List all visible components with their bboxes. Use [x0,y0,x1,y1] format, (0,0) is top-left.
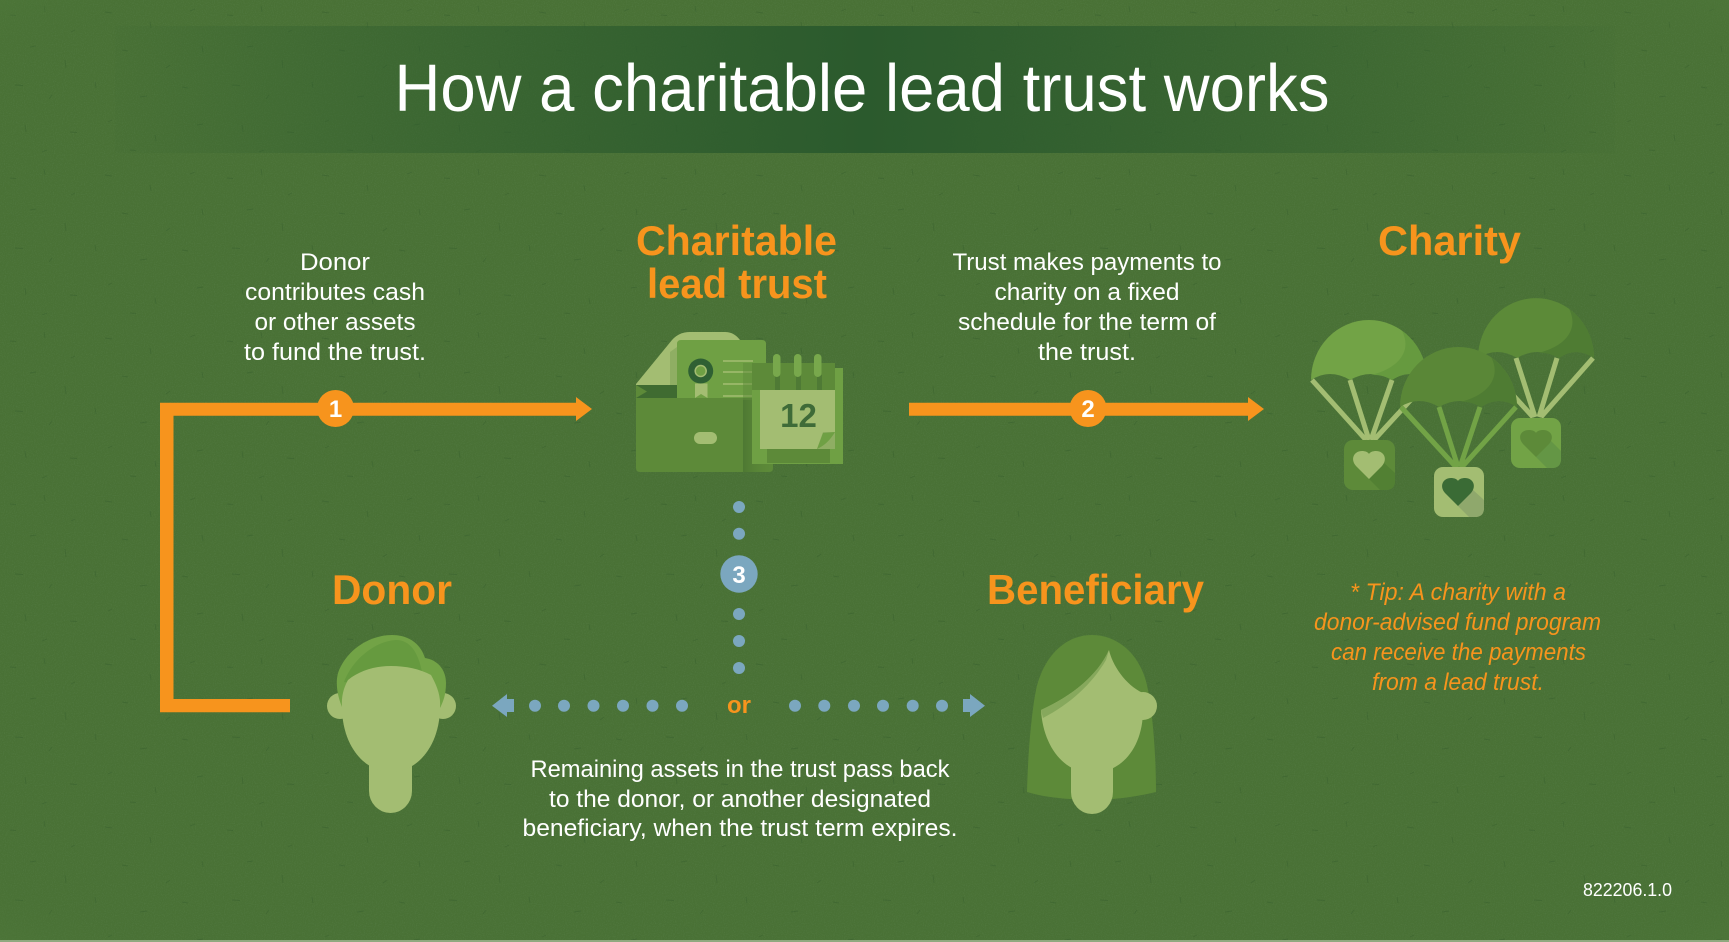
heading: charitable lead trust: Charitable [636,217,837,264]
fringe shadow [1041,650,1109,718]
step 2 text: Trust makes payments to [952,249,1222,276]
icon: donor head [327,635,456,813]
calendar date: 12 [780,397,817,434]
step 3 text [522,756,958,842]
step 2 badge: 2 [1081,396,1095,423]
certificate [677,340,766,400]
arrow 2: trust to charity [909,390,1264,427]
charity tip: from a lead trust. [1372,669,1544,696]
ears [327,693,353,719]
step 1 badge: 1 [329,396,342,423]
step 2 text: charity on a fixed [994,279,1180,306]
heading: donor: Donor [332,566,452,613]
step 3 text: to the donor, or another designated [549,786,931,813]
step 1 text: or other assets [254,309,416,336]
charity tip: can receive the payments [1331,639,1586,666]
step 2 text: schedule for the term of [958,309,1216,336]
charity tip: donor-advised fund program [1314,609,1601,636]
icon: parachutes with hearts [1311,298,1594,517]
icon: beneficiary head [1027,635,1157,814]
step 3 text: beneficiary, when the trust term expires. [522,815,958,842]
parachute: right [1478,298,1594,468]
heading: beneficiary: Beneficiary [987,566,1205,613]
neck [1071,750,1113,814]
calendar [743,354,843,464]
step 1 badge [317,390,354,427]
dark strip [636,385,677,398]
step 1 text: to fund the trust. [244,339,426,366]
parachute: left [1311,320,1429,490]
charity tip: * Tip: A charity with a [1350,579,1566,606]
step 2 text: the trust. [1038,339,1136,366]
heading: charity: Charity [1378,217,1522,264]
hair [337,635,446,708]
face [342,666,440,772]
title: How a charitable lead trust works [394,51,1330,126]
title band [115,26,1615,153]
heading: charitable lead trust: lead trust [647,260,827,307]
heading: charitable lead trust [636,217,837,307]
or label: or [727,692,751,719]
folder flap [636,332,740,400]
step 3 badge: 3 [732,562,746,589]
step 1 text [244,249,426,366]
icon: folder and calendar [636,332,843,472]
parachute: middle [1400,347,1517,517]
face [1041,650,1143,773]
ear [1129,692,1157,720]
step 2 text [952,249,1222,366]
neck [369,750,412,813]
charity tip [1314,579,1601,696]
dotted arrow to beneficiary [789,694,985,717]
step 1 text: Donor [300,249,370,276]
document code: 822206.1.0 [1583,880,1672,900]
step 3 badge [720,555,758,593]
folder front [636,398,773,472]
dotted arrow to donor [492,694,688,717]
step 2 badge [1070,390,1106,427]
arrow 1: donor to trust [160,390,592,712]
step 3 text: Remaining assets in the trust pass back [530,756,950,783]
hair [1027,635,1156,799]
step 3 connector [720,501,758,674]
step 1 text: contributes cash [245,279,425,306]
